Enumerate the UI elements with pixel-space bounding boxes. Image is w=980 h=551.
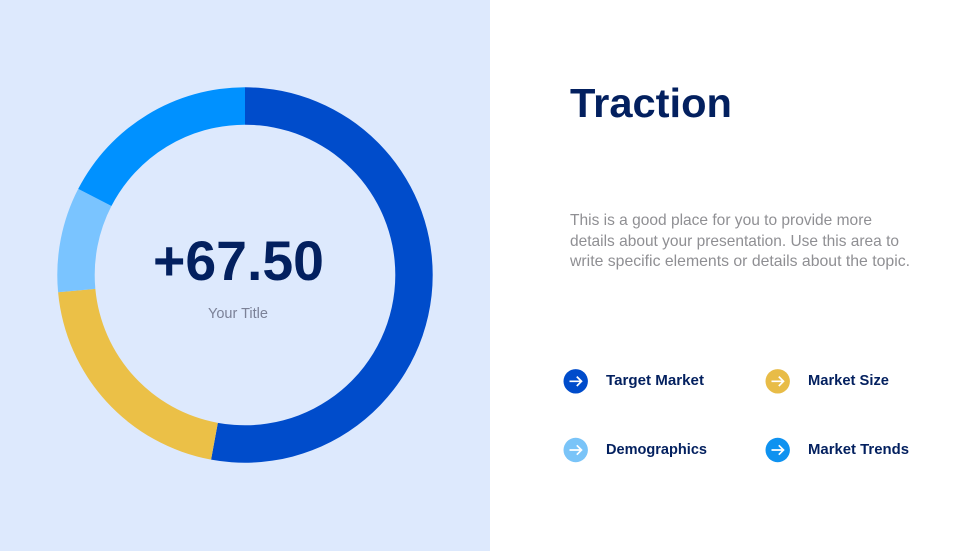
panel: left chart background (0, 0, 490, 551)
body text: write specific elements or details about the topic. (569, 253, 910, 270)
donut chart (57, 87, 433, 463)
label: Demographics (606, 441, 707, 458)
label: Market Trends (808, 441, 909, 458)
icon: medium blue arrow circle (766, 438, 790, 462)
legend item: Market Size (766, 369, 889, 393)
segment: light blue (57, 189, 111, 292)
segment: dark blue (211, 87, 433, 463)
segment: medium blue (78, 87, 245, 206)
body text (569, 212, 910, 270)
label: Market Size (808, 372, 889, 389)
donut center value: +67.50 (153, 229, 324, 292)
icon: dark blue arrow circle (564, 369, 588, 393)
label: Target Market (606, 372, 704, 389)
legend item: Demographics (564, 438, 707, 462)
icon: light blue arrow circle (564, 438, 588, 462)
icon: yellow arrow circle (766, 369, 790, 393)
segment: yellow (58, 289, 218, 460)
body text: This is a good place for you to provide more (570, 212, 872, 229)
body text: details about your presentation. Use this area to (570, 233, 899, 250)
donut center label: Your Title (208, 305, 268, 322)
title: Traction (570, 80, 732, 126)
legend item: Target Market (564, 369, 704, 393)
legend item: Market Trends (766, 438, 909, 462)
